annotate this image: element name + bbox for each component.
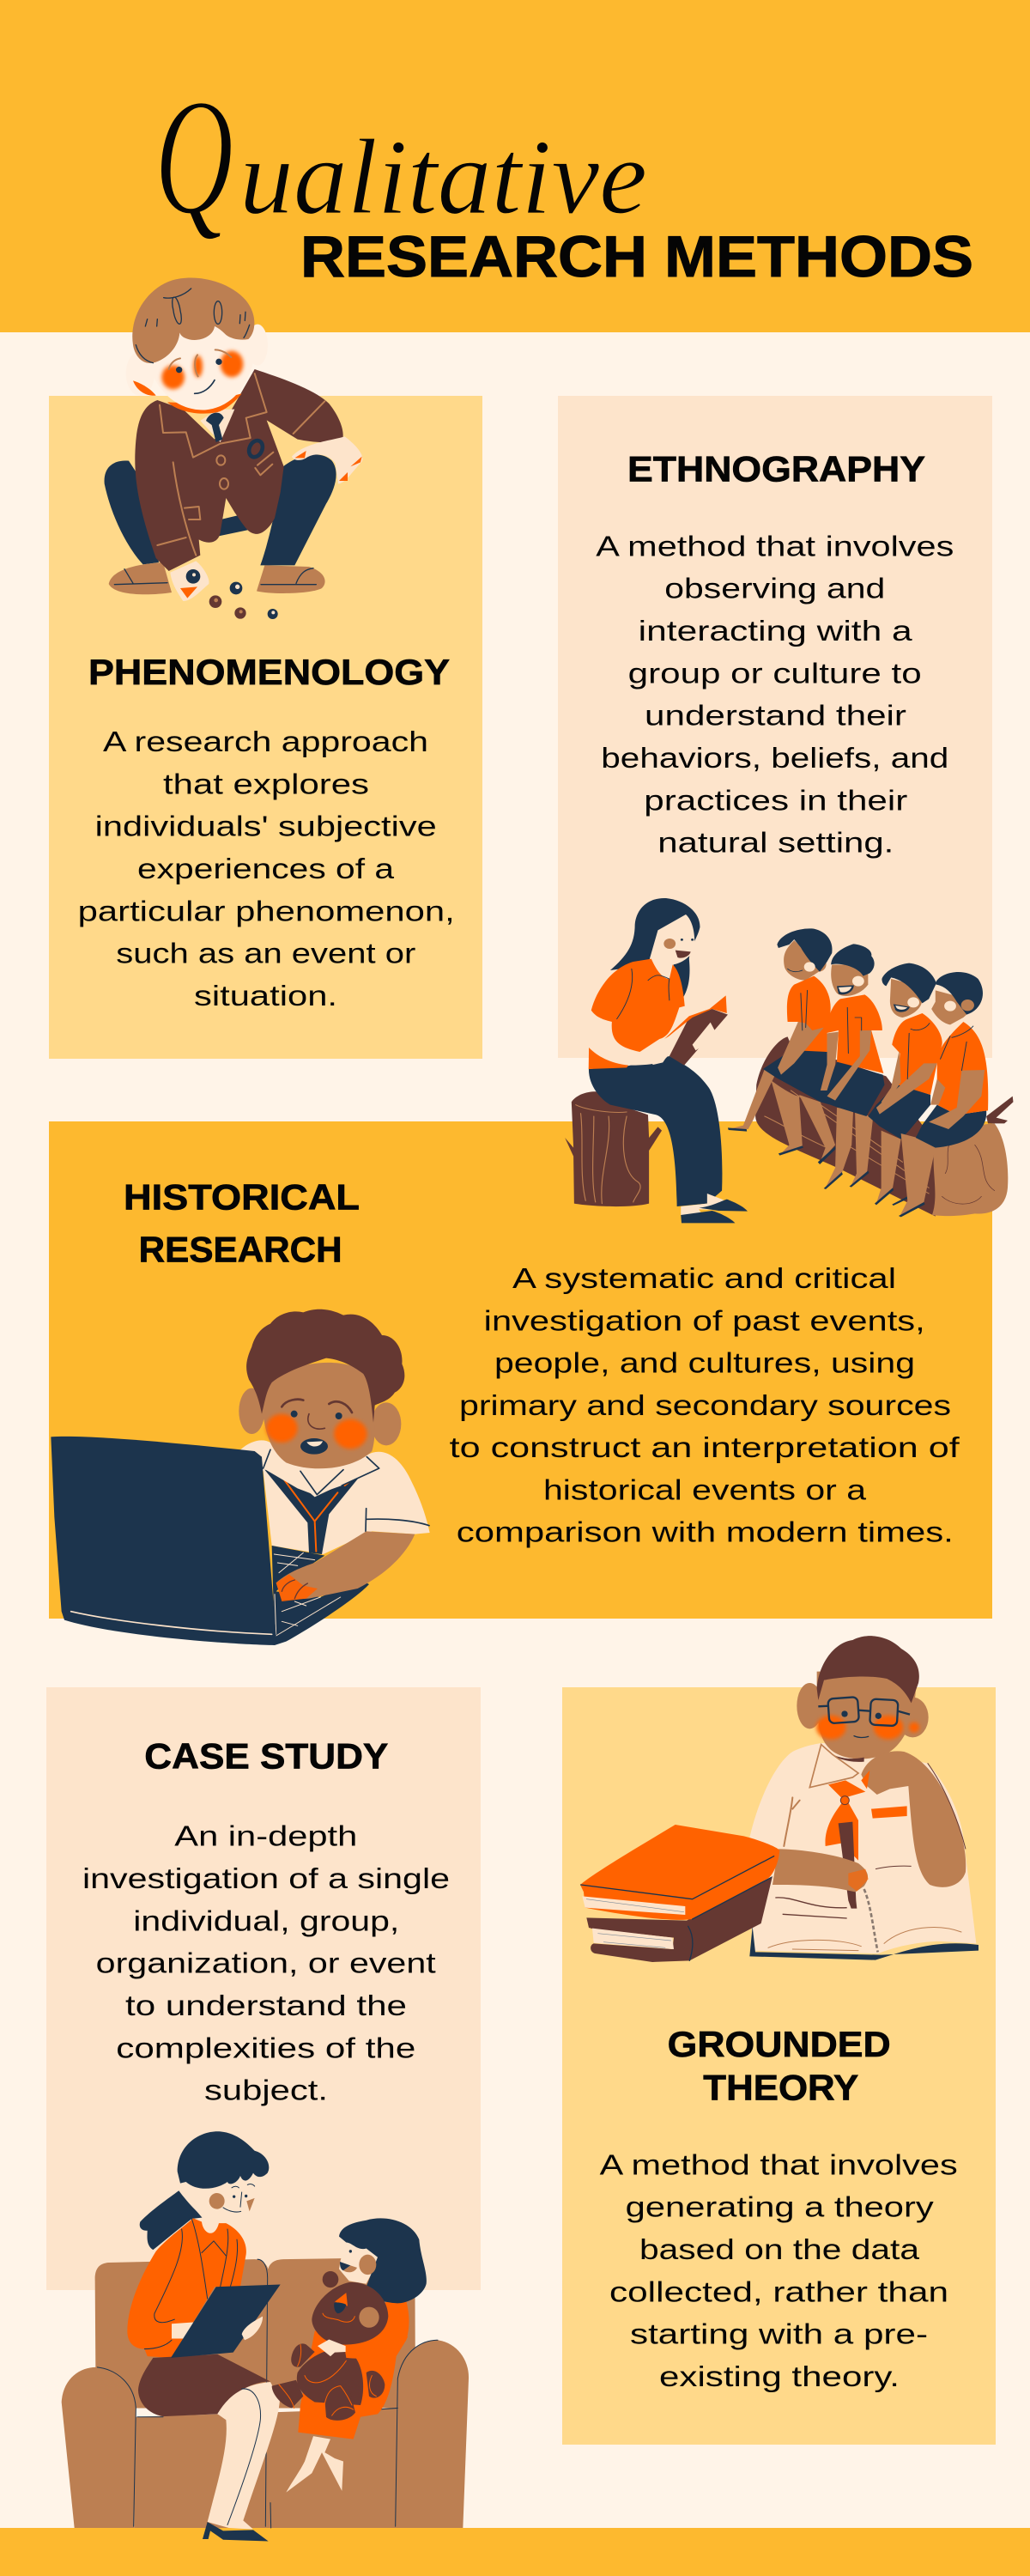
- face: [167, 393, 242, 414]
- navy trousers: [105, 454, 336, 565]
- text: ethnography description: interacting with a: [639, 615, 913, 647]
- title: [154, 64, 973, 289]
- arm: [276, 1531, 415, 1600]
- text: ethnography description: observing and: [664, 573, 885, 605]
- heading: grounded theory: GROUNDED: [668, 2024, 891, 2064]
- text: historical research description: to construct an interpretation of: [450, 1431, 960, 1463]
- heading: ethnography: ETHNOGRAPHY: [627, 449, 925, 489]
- panel: historical research: [49, 1121, 992, 1619]
- text: historical research description: primary and secondary sources: [459, 1389, 951, 1421]
- text: ethnography description: group or culture to: [628, 657, 922, 689]
- heading: grounded theory: [668, 2024, 891, 2107]
- text: phenomenology description: experiences of a: [137, 853, 395, 884]
- text: phenomenology description: particular phenomenon,: [78, 895, 455, 927]
- text: case study description: An in-depth: [174, 1820, 357, 1852]
- upper arm: [861, 1751, 966, 1887]
- panel: ethnography: [558, 396, 992, 1058]
- text: phenomenology description: that explores: [163, 768, 369, 799]
- head: [263, 1363, 375, 1468]
- hands and marbles: [292, 436, 362, 483]
- text: grounded theory description: existing theory.: [659, 2360, 900, 2392]
- heading: historical research: RESEARCH: [139, 1229, 342, 1269]
- teddy bear: [272, 2271, 388, 2421]
- panel: phenomenology: [49, 396, 482, 1059]
- shirt: [240, 1440, 430, 1554]
- illustration: boy with books and notebook: [580, 1636, 978, 1962]
- heading: historical research: [124, 1177, 360, 1269]
- text: grounded theory description: generating a theory: [626, 2191, 934, 2223]
- sofa: [62, 2257, 469, 2528]
- text: case study description: [82, 1820, 450, 2106]
- panel: case study: [46, 1687, 481, 2290]
- heading: phenomenology: PHENOMENOLOGY: [88, 652, 450, 692]
- text: grounded theory description: based on the data: [639, 2233, 920, 2265]
- text: historical research description: people, and cultures, using: [494, 1347, 915, 1379]
- text: case study description: investigation of a single: [82, 1862, 450, 1894]
- illustration: boy playing marbles: [105, 278, 362, 619]
- shirt: [749, 1743, 976, 1953]
- text: ethnography description: practices in their: [644, 784, 907, 816]
- pen: [839, 1822, 857, 1909]
- text: ethnography description: understand their: [645, 700, 906, 732]
- student 4: [899, 972, 988, 1217]
- text: phenomenology description: situation.: [194, 980, 337, 1012]
- text: ethnography description: [596, 530, 954, 859]
- illustration: boy at laptop: [51, 1309, 430, 1645]
- collar and neckerchief: [809, 1745, 858, 1788]
- student 1: [728, 928, 835, 1164]
- title script line: Q: [154, 64, 233, 250]
- text: ethnography description: behaviors, beliefs, and: [601, 742, 948, 774]
- student 2: [821, 944, 884, 1189]
- text: historical research description: comparison with modern times.: [457, 1516, 954, 1548]
- illustration: teacher reading to students on a log: [565, 898, 1013, 1223]
- heading: case study: CASE STUDY: [144, 1735, 388, 1776]
- keyboard deck: [272, 1546, 369, 1645]
- text: historical research description: [450, 1262, 960, 1548]
- shoes: [109, 562, 172, 594]
- text: case study description: to understand the: [125, 1990, 407, 2021]
- text: ethnography description: A method that involves: [596, 530, 954, 562]
- text: phenomenology description: such as an event or: [116, 938, 415, 969]
- laptop lid: [51, 1437, 276, 1645]
- footer band: [0, 2528, 1030, 2576]
- log: [755, 1036, 1013, 1217]
- text: case study description: subject.: [204, 2075, 328, 2106]
- book stack: [580, 1825, 779, 1962]
- text: grounded theory description: [600, 2148, 958, 2392]
- vest: [264, 1470, 360, 1554]
- notebook: [749, 1872, 978, 1960]
- panel: grounded theory: [562, 1687, 996, 2445]
- student 3: [868, 963, 942, 1206]
- text: historical research description: A systematic and critical: [512, 1262, 896, 1294]
- teacher: [589, 898, 748, 1223]
- text: historical research description: historical events or a: [543, 1473, 867, 1505]
- child and teddy bear: [272, 2218, 427, 2493]
- text: grounded theory description: collected, rather than: [609, 2275, 948, 2307]
- hair: [132, 278, 254, 363]
- jacket: [135, 369, 343, 571]
- text: case study description: individual, group,: [133, 1905, 399, 1936]
- woman: [127, 2131, 281, 2541]
- heading: historical research: HISTORICAL: [124, 1177, 360, 1218]
- text: phenomenology description: [78, 726, 455, 1012]
- text: ethnography description: natural setting.: [657, 827, 894, 859]
- text: case study description: complexities of the: [116, 2032, 415, 2063]
- writing arm: [772, 1849, 868, 1892]
- heading: grounded theory: THEORY: [703, 2067, 858, 2107]
- header band: [0, 0, 1030, 332]
- text: historical research description: investigation of past events,: [484, 1304, 925, 1336]
- text: grounded theory description: A method that involves: [600, 2148, 958, 2180]
- illustration: woman and child on sofa: [62, 2131, 469, 2541]
- text: case study description: organization, or event: [96, 1947, 436, 1979]
- title script line: ualitative: [239, 118, 647, 237]
- head: [817, 1672, 916, 1759]
- text: grounded theory description: starting with a pre-: [630, 2318, 928, 2350]
- text: phenomenology description: individuals' subjective: [95, 811, 437, 842]
- teacher stump: [565, 1091, 662, 1206]
- text: phenomenology description: A research approach: [103, 726, 428, 757]
- title bold line: RESEARCH METHODS: [300, 224, 973, 289]
